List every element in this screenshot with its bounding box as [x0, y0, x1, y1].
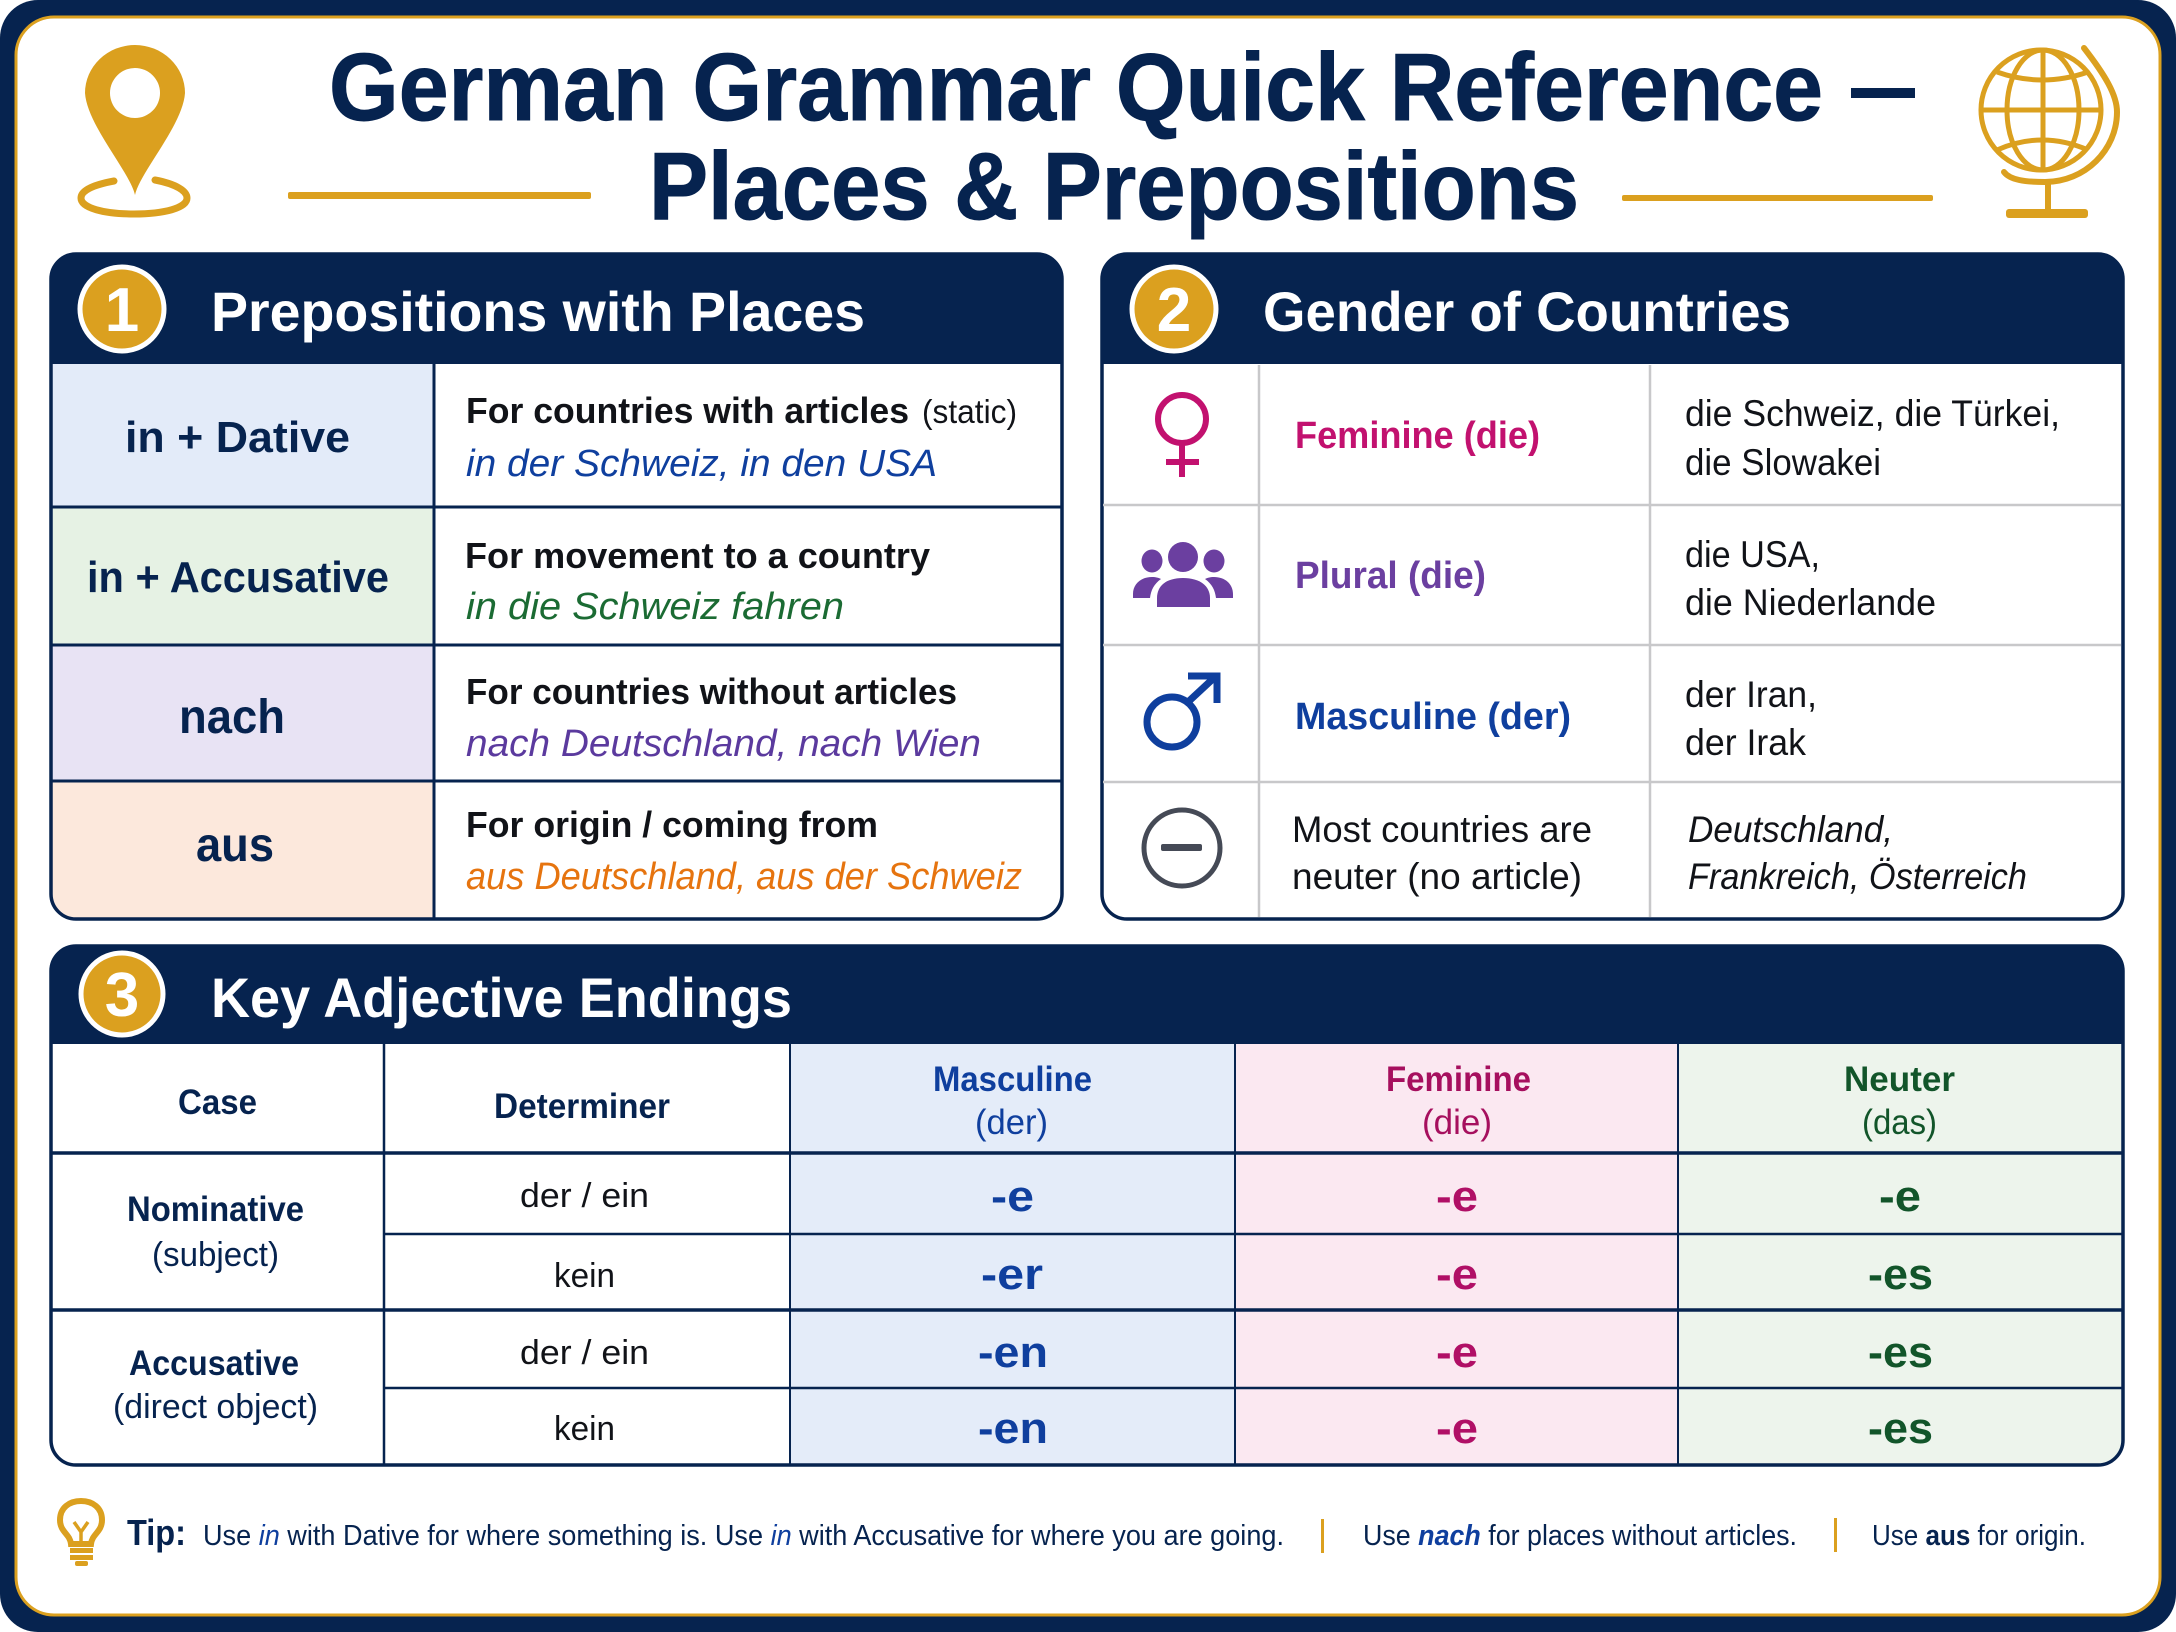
- icon: globe: [1981, 48, 2117, 218]
- icon: plural people: [1133, 542, 1233, 607]
- row labels: cases: [113, 1190, 318, 1426]
- section 2 badge: 2: [1157, 276, 1191, 345]
- table column headers: Case: [178, 1083, 257, 1122]
- determiners: der / ein: [520, 1177, 649, 1215]
- feminine endings: -e: [1436, 1250, 1478, 1299]
- neuter endings: -es: [1868, 1328, 1933, 1377]
- row: in + Dative: in + Dative: [125, 413, 350, 462]
- masculine endings: [978, 1172, 1048, 1453]
- row: masculine: der Iran,: [1685, 674, 1817, 715]
- row: in + Dative: [125, 390, 1017, 485]
- row labels: cases: Nominative: [127, 1190, 304, 1229]
- section 1 header bar: [50, 253, 1063, 364]
- row: in + Accusative: in + Accusative: [87, 553, 389, 602]
- section 1 outline: [51, 254, 1062, 919]
- section 1 cell fills: [52, 364, 434, 921]
- section 2 badge: [1132, 267, 1216, 351]
- section 3 column fills: [790, 1044, 2124, 1468]
- section 1 grid lines: [51, 364, 1062, 919]
- section 2 heading: Gender of Countries: [1263, 280, 1791, 343]
- determiners: kein: [554, 1410, 615, 1448]
- tip bar: [127, 1512, 2086, 1553]
- tip sentence one: Use in with Dative for where something is. Use in with Accusative for where you are going.: [203, 1520, 1284, 1552]
- row: neuter: Deutschland,: [1688, 809, 1893, 850]
- icon: feminine symbol: [1158, 395, 1206, 477]
- row: masculine: der Irak: [1685, 722, 1806, 763]
- row: nach: For countries without articles: [466, 671, 957, 712]
- table column headers: Determiner: [494, 1087, 670, 1126]
- panel: prepositions with places: [50, 253, 1063, 921]
- table column headers: Neuter: [1844, 1060, 1955, 1099]
- row: masculine: [1295, 674, 1817, 763]
- table column headers: (der): [975, 1103, 1048, 1142]
- row: neuter: Frankreich, Österreich: [1688, 856, 2027, 897]
- row: in + Accusative: For movement to a country: [465, 535, 930, 576]
- row: nach: nach Deutschland, nach Wien: [466, 723, 981, 765]
- tip bar: Tip:: [127, 1512, 186, 1553]
- section 2 header bar: [1101, 253, 2124, 364]
- row: feminine: [1295, 393, 2060, 483]
- row: plural: [1295, 534, 1936, 623]
- row: in + Dative: For countries with articles: [466, 390, 909, 431]
- right title rule: [1622, 195, 1933, 201]
- section 2 grid lines: [1103, 365, 2121, 917]
- row: nach: nach: [179, 691, 285, 744]
- masculine endings: -er: [981, 1250, 1043, 1299]
- row: neuter: [1292, 809, 2027, 897]
- section 3 badge: [81, 953, 163, 1035]
- neuter endings: -e: [1879, 1172, 1921, 1221]
- masculine endings: -en: [978, 1328, 1048, 1377]
- neuter endings: [1868, 1172, 1933, 1453]
- tip sentence two: Use nach for places without articles.: [1363, 1520, 1797, 1552]
- masculine endings: -e: [991, 1172, 1034, 1221]
- panel: key adjective endings: [50, 945, 2124, 1468]
- row: aus: For origin / coming from: [466, 804, 878, 845]
- neuter endings: -es: [1868, 1404, 1933, 1453]
- icon: light bulb: [60, 1501, 102, 1566]
- section 1 badge: 1: [105, 276, 139, 345]
- section 1 heading: Prepositions with Places: [211, 280, 865, 343]
- row: feminine: die Schweiz, die Türkei,: [1685, 393, 2060, 434]
- table column headers: (die): [1422, 1103, 1492, 1142]
- table column headers: [178, 1060, 1955, 1142]
- tip sentence three: Use aus for origin.: [1872, 1520, 2086, 1552]
- row: aus: [196, 804, 1022, 898]
- row: feminine: die Slowakei: [1685, 442, 1881, 483]
- section 1 badge: [80, 267, 164, 351]
- icon: no article minus circle: [1144, 810, 1220, 886]
- row: plural: die USA,: [1685, 534, 1820, 575]
- determiners: [520, 1177, 649, 1448]
- determiners: kein: [554, 1257, 615, 1295]
- row: in + Dative: (static): [922, 393, 1017, 430]
- section 3 badge: 3: [105, 961, 139, 1030]
- title: Places & Prepositions: [649, 133, 1579, 240]
- neuter endings: -es: [1868, 1250, 1933, 1299]
- section 3 heading: Key Adjective Endings: [211, 966, 792, 1029]
- row labels: cases: (subject): [152, 1236, 279, 1274]
- title: [329, 34, 1915, 240]
- row: in + Accusative: in die Schweiz fahren: [466, 586, 844, 628]
- row labels: cases: (direct object): [113, 1388, 318, 1426]
- row: in + Accusative: [87, 535, 930, 628]
- row: neuter: neuter (no article): [1292, 856, 1582, 897]
- feminine endings: -e: [1436, 1404, 1478, 1453]
- left title rule: [288, 192, 591, 199]
- tip separator two: [1834, 1518, 1837, 1552]
- table column headers: Masculine: [933, 1060, 1092, 1099]
- feminine endings: [1436, 1172, 1478, 1453]
- section 3 header bar: [50, 945, 2124, 1044]
- section 3 grid lines: [52, 1044, 2122, 1465]
- masculine endings: -en: [978, 1404, 1048, 1453]
- title: German Grammar Quick Reference: [329, 34, 1823, 141]
- row: aus: aus: [196, 819, 274, 872]
- icon: masculine symbol: [1147, 676, 1217, 747]
- row labels: cases: Accusative: [129, 1344, 299, 1383]
- table column headers: (das): [1862, 1103, 1937, 1142]
- section 3 outline: [51, 946, 2123, 1465]
- row: neuter: Most countries are: [1292, 809, 1592, 850]
- row: masculine: Masculine (der): [1295, 696, 1571, 738]
- feminine endings: -e: [1436, 1172, 1478, 1221]
- tip separator one: [1321, 1519, 1324, 1553]
- panel: gender of countries: [1101, 253, 2124, 919]
- row: nach: [179, 671, 981, 765]
- table column headers: Feminine: [1386, 1060, 1531, 1099]
- determiners: der / ein: [520, 1334, 649, 1372]
- row: plural: die Niederlande: [1685, 582, 1936, 623]
- row: aus: aus Deutschland, aus der Schweiz: [466, 856, 1022, 898]
- row: in + Dative: in der Schweiz, in den USA: [466, 443, 937, 485]
- feminine endings: -e: [1436, 1328, 1478, 1377]
- icon: map pin: [81, 45, 187, 214]
- row: plural: Plural (die): [1295, 555, 1486, 597]
- row: feminine: Feminine (die): [1295, 415, 1540, 457]
